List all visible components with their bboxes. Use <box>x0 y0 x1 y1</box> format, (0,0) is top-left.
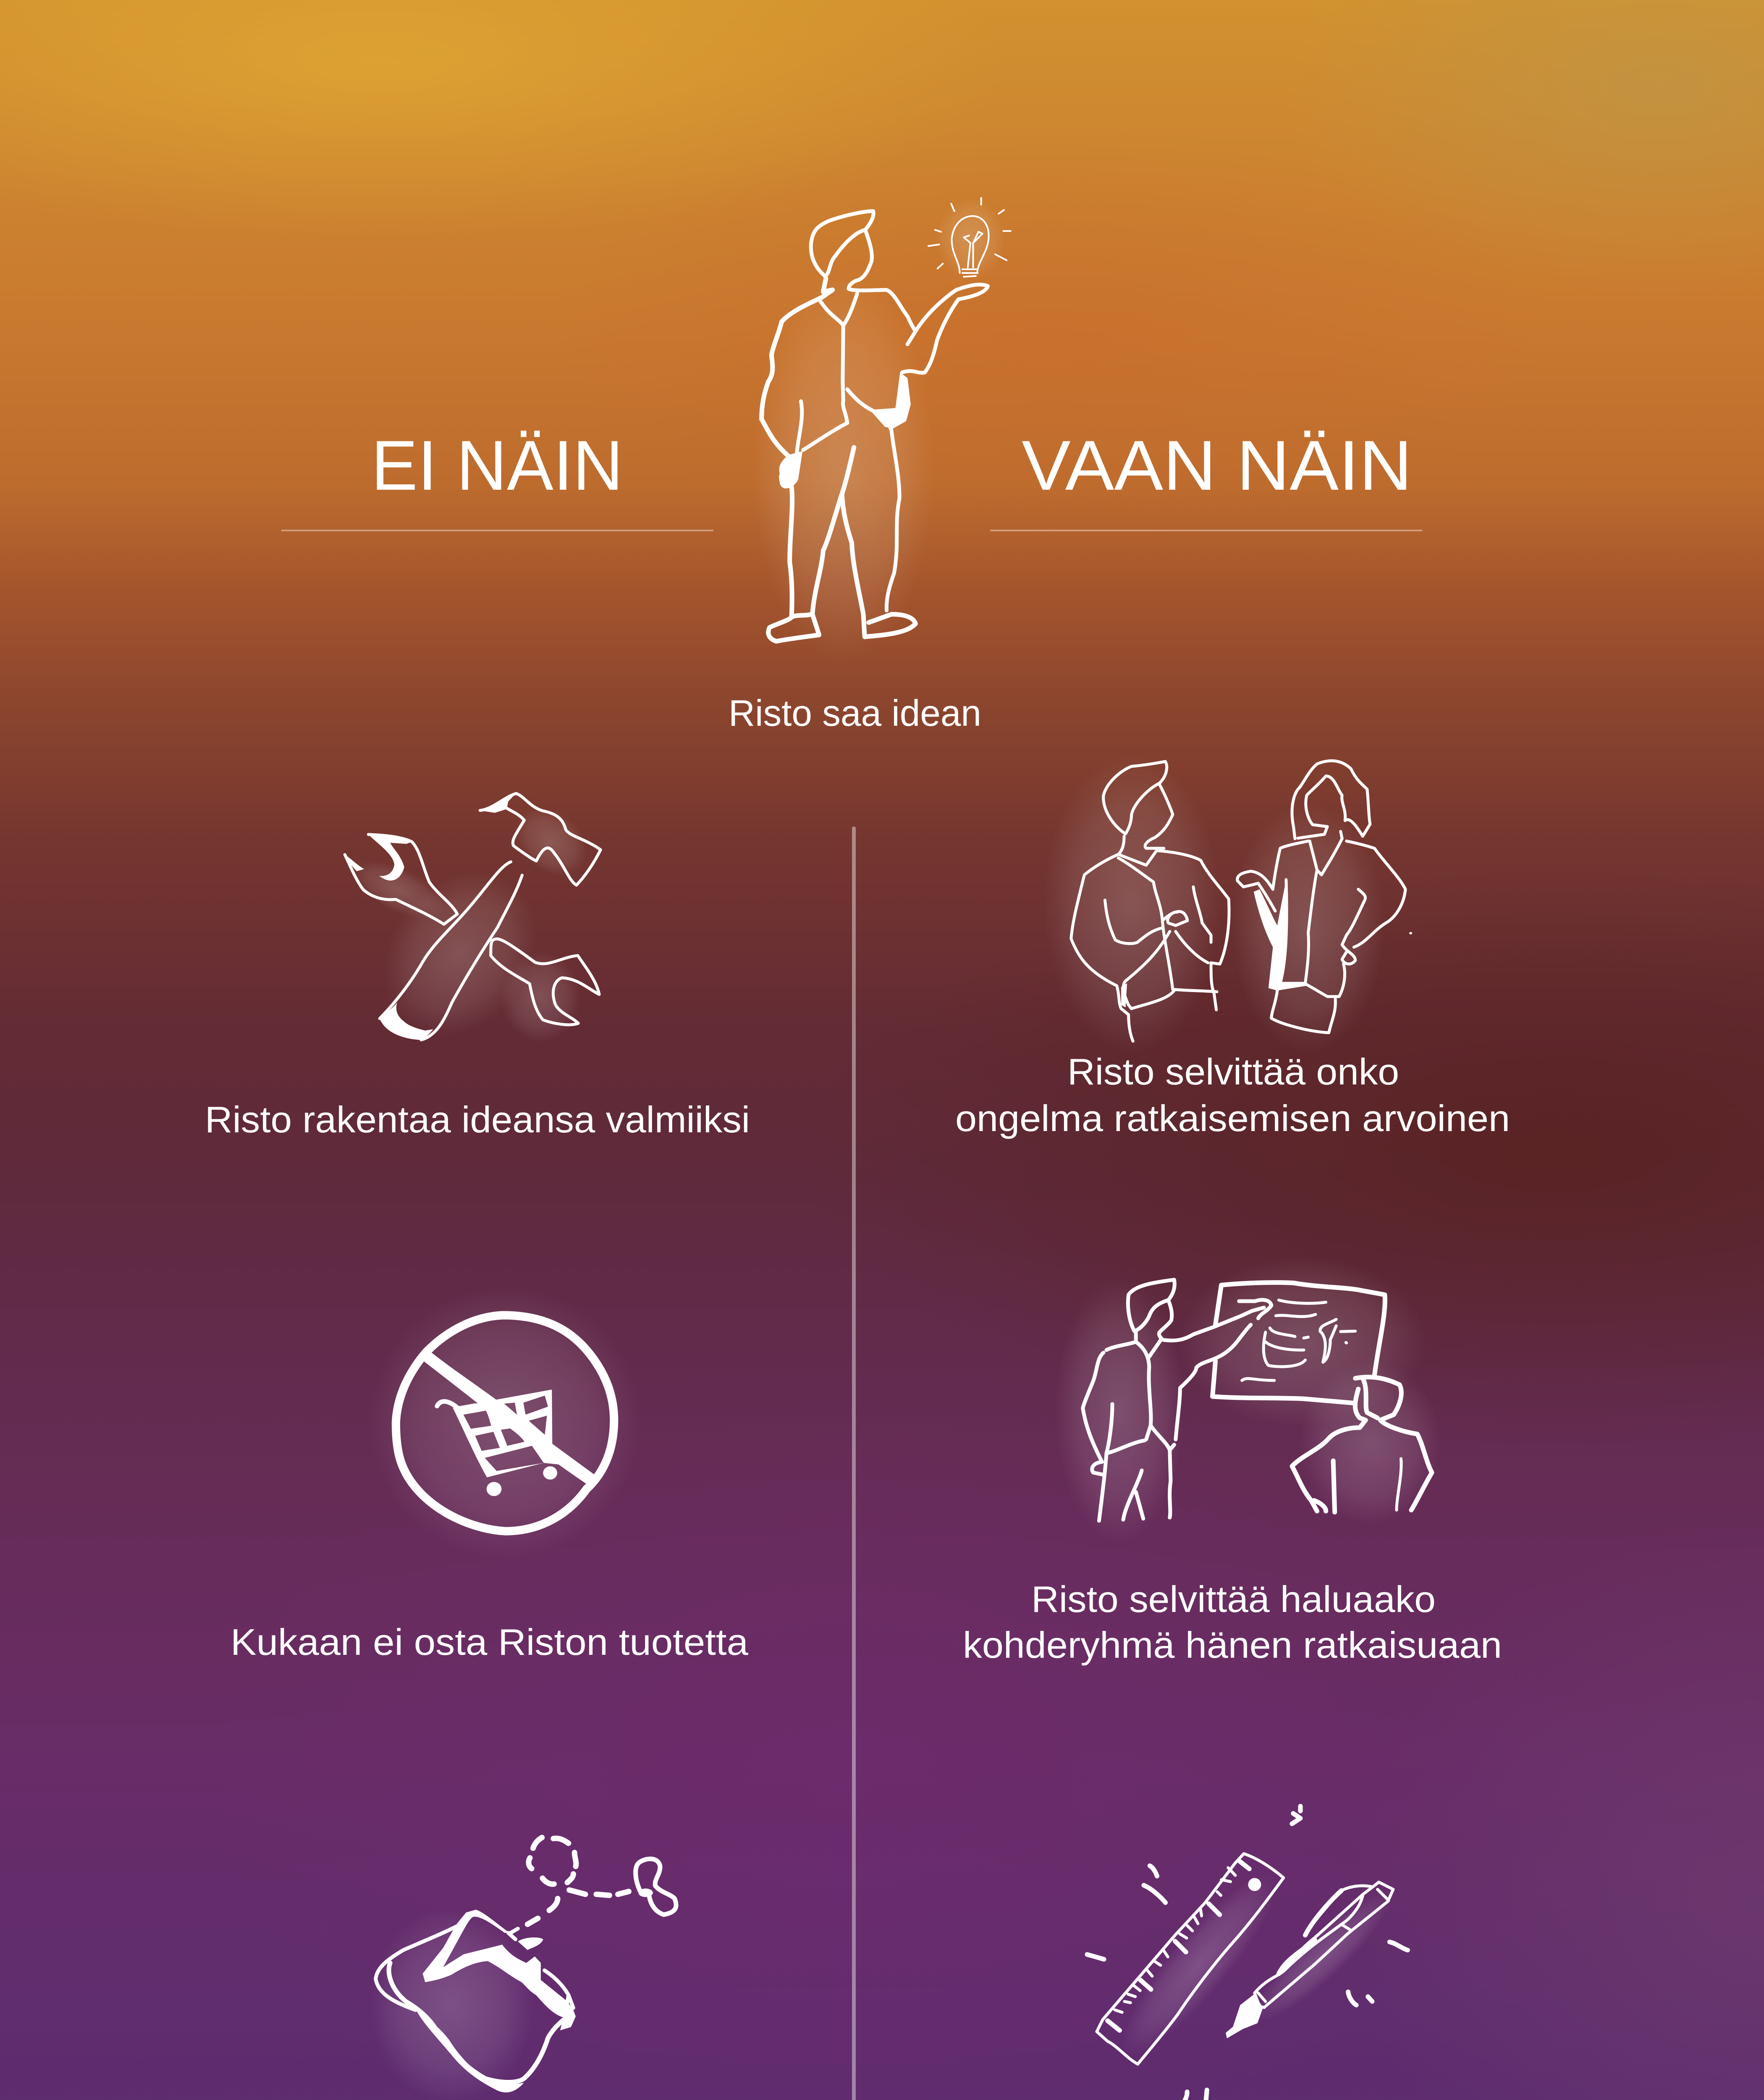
icon: empty purse <box>370 1838 676 2100</box>
icon: ruler and pen <box>1087 1806 1408 2100</box>
caption: Kukaan ei osta Riston tuotetta: Kukaan ei osta Riston tuotetta <box>231 1621 748 1663</box>
caption: kohderyhmä hänen ratkaisuaan: kohderyhmä hänen ratkaisuaan <box>963 1624 1502 1666</box>
icon: no shopping cart <box>368 1286 642 1559</box>
icon: teacher at whiteboard with listener <box>1055 1256 1441 1543</box>
caption: ongelma ratkaisemisen arvoinen: ongelma ratkaisemisen arvoinen <box>955 1097 1510 1139</box>
heading: VAAN NÄIN: VAAN NÄIN <box>1022 426 1412 505</box>
caption: Risto selvittää haluaako: Risto selvittää haluaako <box>1031 1578 1436 1620</box>
caption: Risto selvittää onko: Risto selvittää onko <box>1067 1051 1399 1092</box>
icon: hammer and wrench <box>343 793 601 1066</box>
vertical divider <box>852 827 856 2100</box>
icon: two people talking <box>1043 754 1412 1053</box>
heading: VAAN NÄIN <box>990 426 1422 531</box>
icon: person with light bulb <box>752 198 1011 663</box>
heading: EI NÄIN <box>281 426 713 531</box>
heading: EI NÄIN: EI NÄIN <box>371 426 623 505</box>
caption: Risto saa idean: Risto saa idean <box>729 692 981 734</box>
caption: Risto rakentaa ideansa valmiiksi: Risto rakentaa ideansa valmiiksi <box>205 1099 750 1140</box>
